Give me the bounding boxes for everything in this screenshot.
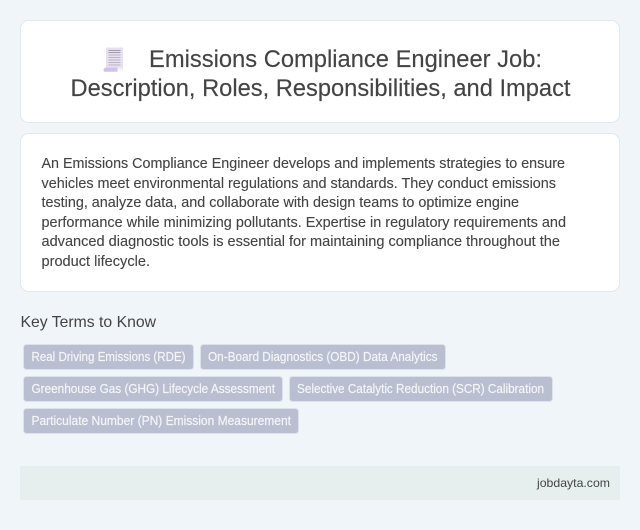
title: Emissions Compliance Engineer Job: <box>149 46 542 73</box>
heading: key terms: Key Terms to Know <box>20 314 156 331</box>
chip: real driving emissions: Real Driving Emissions (RDE) <box>32 350 186 364</box>
chip: real driving emissions <box>24 344 194 370</box>
chip: selective catalytic reduction: Selective Catalytic Reduction (SCR) Calibration <box>297 382 544 396</box>
icon: document scroll <box>104 48 123 72</box>
text block: description <box>42 156 566 270</box>
text block: description: performance while minimizing pollutants. Expertise in regulatory requirements and <box>42 215 566 231</box>
chip: greenhouse gas <box>24 376 282 402</box>
footer <box>20 466 620 500</box>
panel: description card <box>20 134 620 292</box>
footer: jobdayta.com <box>536 476 610 490</box>
text block: description: testing, analyze data, and collaborate with design teams to optimize engine <box>42 195 519 211</box>
chip: selective catalytic reduction <box>290 376 552 402</box>
text block: description: An Emissions Compliance Engineer develops and implements strategies to ensure <box>42 156 565 172</box>
chip: on-board diagnostics <box>200 344 446 370</box>
title: Description, Roles, Responsibilities, and Impact <box>70 75 571 102</box>
panel: title card <box>20 20 620 122</box>
chip: on-board diagnostics: On-Board Diagnostics (OBD) Data Analytics <box>208 350 438 364</box>
chip: particulate number <box>24 408 298 434</box>
text block: description: advanced diagnostic tools is essential for maintaining compliance throughout the <box>42 234 560 250</box>
title <box>70 46 571 102</box>
panel: key term chips <box>24 344 552 434</box>
text block: description: vehicles meet environmental regulations and standards. They conduct emissions <box>42 176 556 192</box>
text block: description: product lifecycle. <box>42 254 150 270</box>
chip: greenhouse gas: Greenhouse Gas (GHG) Lifecycle Assessment <box>32 382 275 396</box>
chip: particulate number: Particulate Number (PN) Emission Measurement <box>32 414 291 428</box>
